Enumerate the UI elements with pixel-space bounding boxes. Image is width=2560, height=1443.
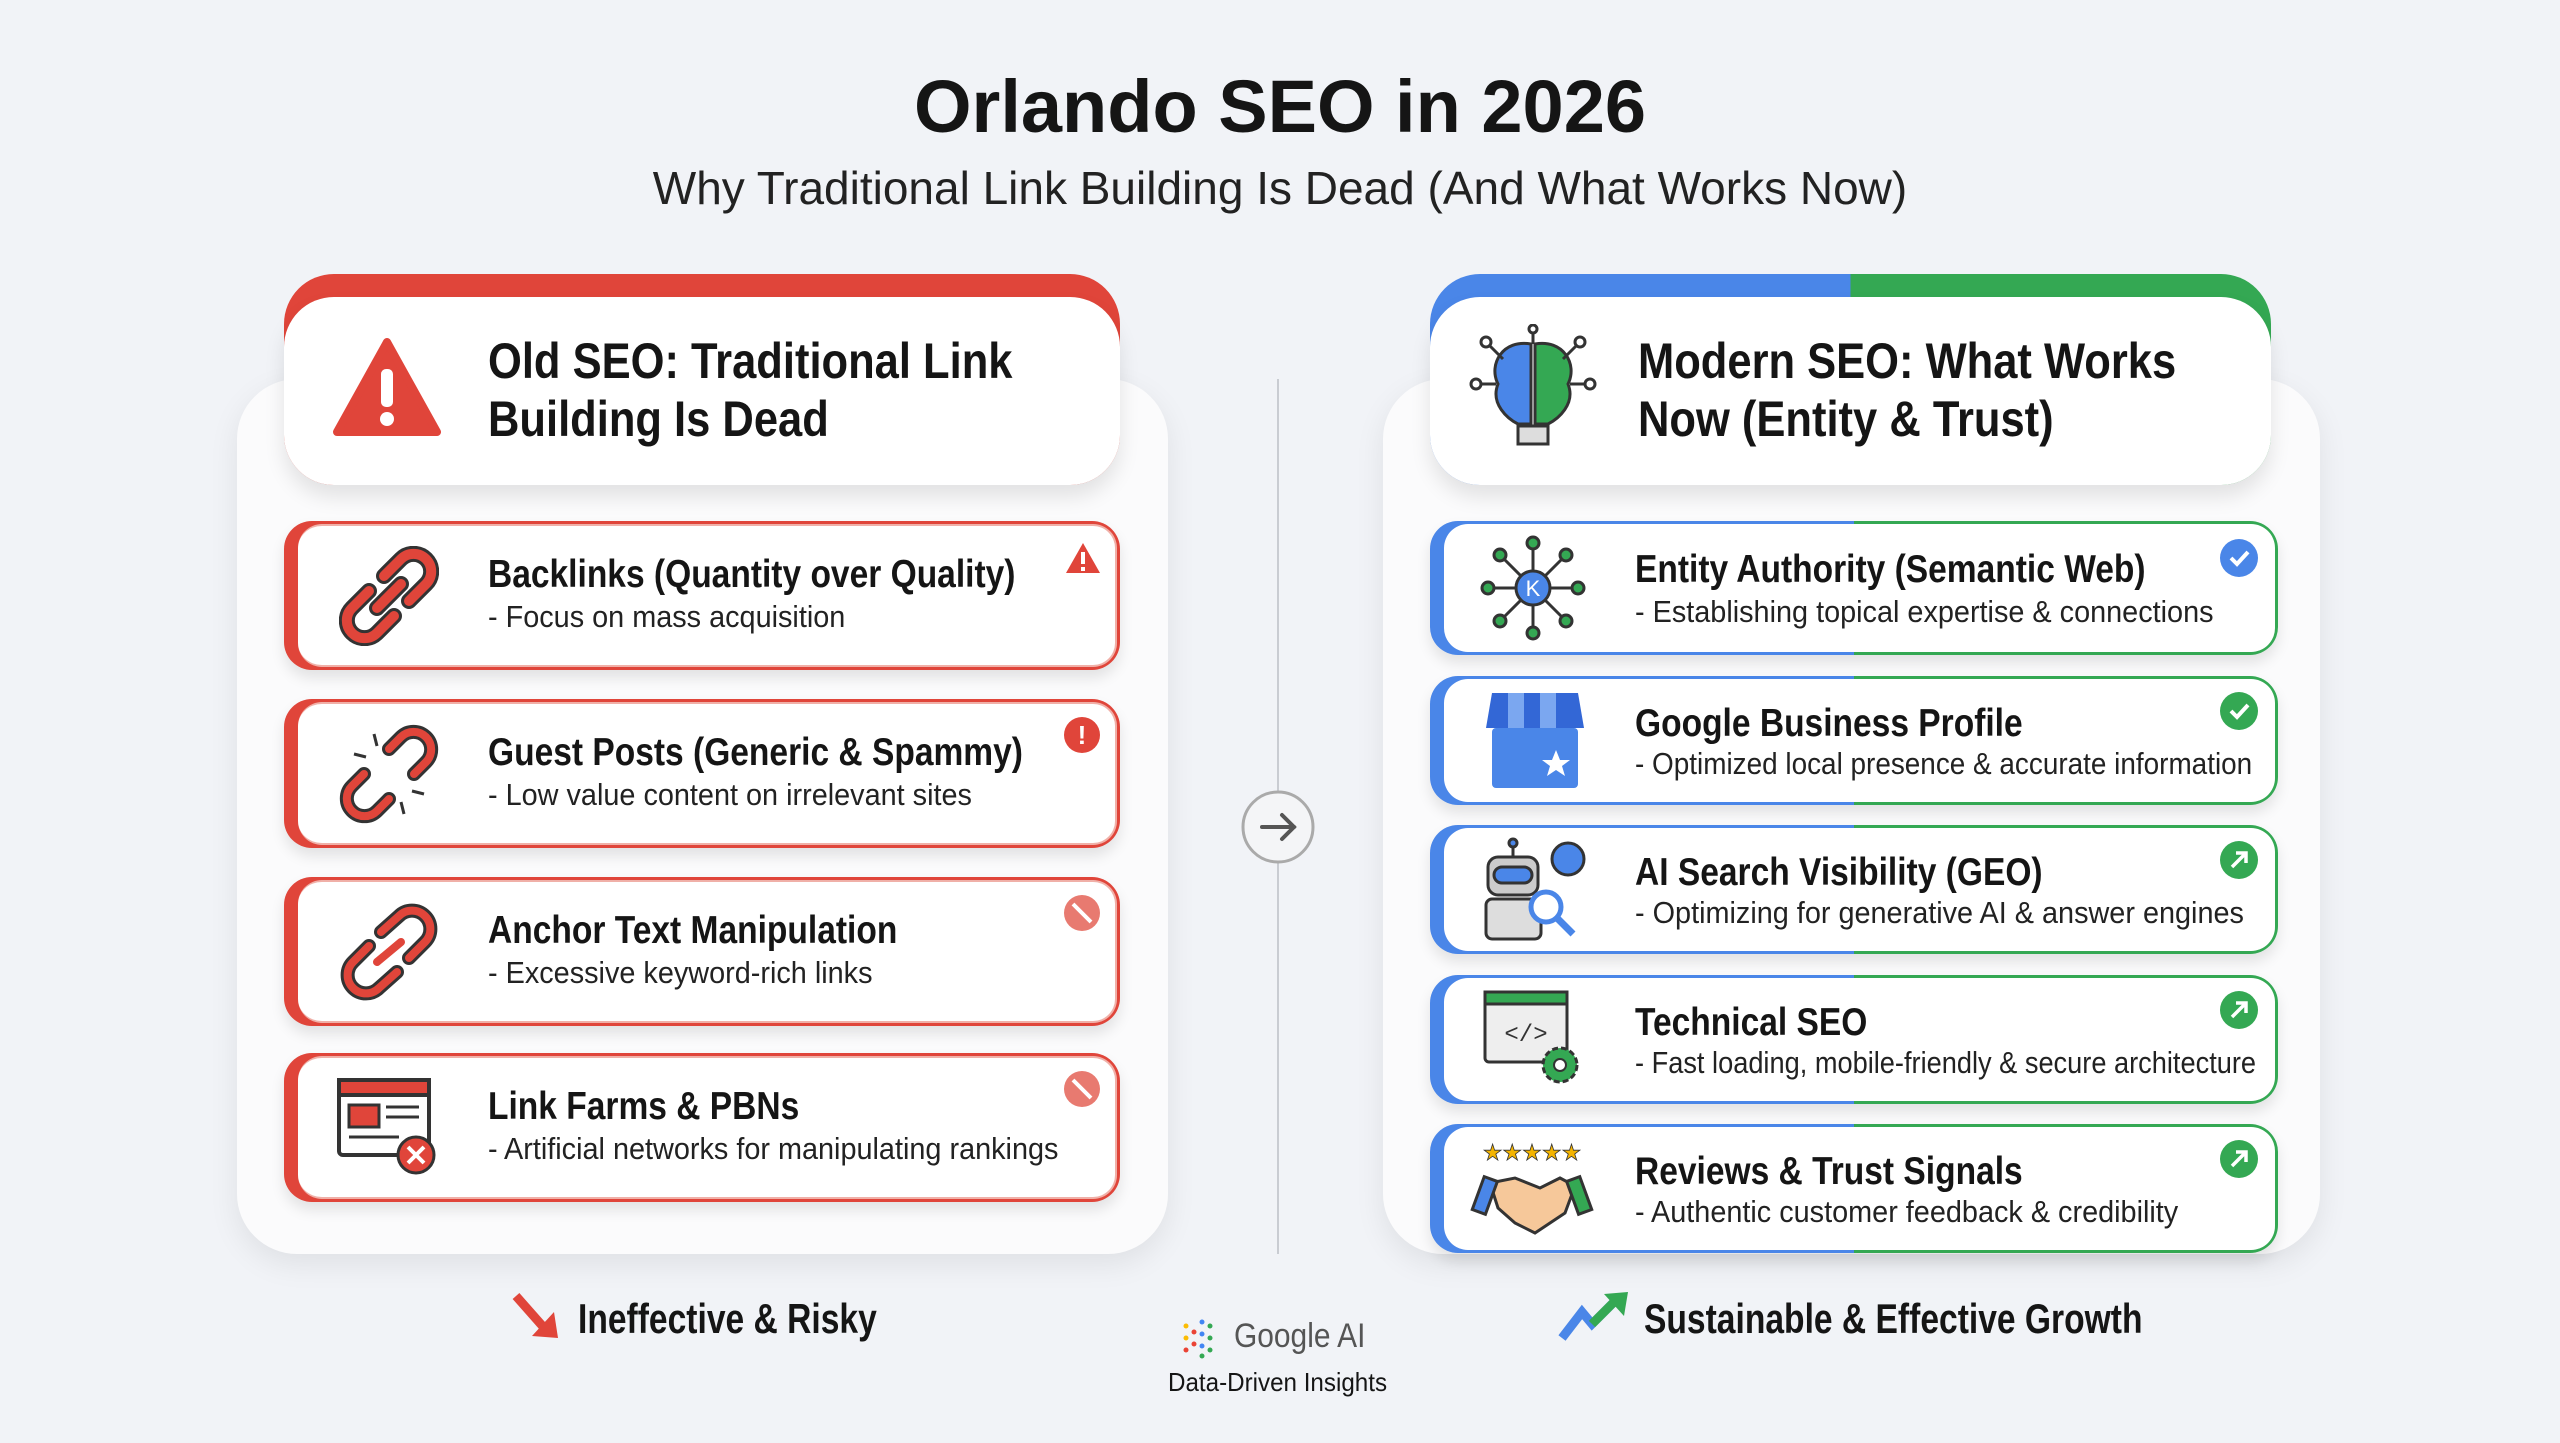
icon: growth arrow bbox=[1558, 1292, 1628, 1341]
item: guest posts bbox=[284, 699, 1120, 848]
badge: alert: ! bbox=[1078, 720, 1086, 750]
footer: google ai: Google AI bbox=[1234, 1317, 1365, 1355]
text: guest posts: Guest Posts (Generic & Spammy) bbox=[488, 731, 1023, 774]
icon: warning triangle bbox=[333, 338, 441, 436]
badge: blocked bbox=[1064, 1071, 1100, 1107]
item: anchor text: - Excessive keyword-rich links bbox=[488, 955, 872, 990]
icon: stars and handshake: ★★★★★ bbox=[1483, 1141, 1581, 1166]
item: backlinks bbox=[284, 521, 1120, 670]
text: backlinks: Backlinks (Quantity over Quality) bbox=[488, 553, 1015, 596]
footer: ineffective & risky: Ineffective & Risky bbox=[578, 1295, 877, 1342]
heading: old seo bbox=[488, 333, 1012, 447]
item: entity authority bbox=[1430, 521, 2278, 655]
icon: stars and handshake bbox=[1470, 1141, 1594, 1235]
item: link farms bbox=[284, 1053, 1120, 1202]
heading: modern seo: Now (Entity & Trust) bbox=[1638, 391, 2054, 447]
text: link farms: Link Farms & PBNs bbox=[488, 1085, 799, 1128]
icon: code window gear bbox=[1484, 990, 1578, 1084]
badge: trend up bbox=[2220, 841, 2258, 879]
panel: modern seo bbox=[1383, 379, 2320, 1254]
item: anchor text bbox=[284, 877, 1120, 1026]
item: google business profile bbox=[1430, 676, 2278, 805]
item: technical seo: - Fast loading, mobile-friendly & secure architecture bbox=[1635, 1045, 2256, 1080]
header: old seo bbox=[284, 274, 1120, 485]
heading: old seo: Old SEO: Traditional Link bbox=[488, 333, 1012, 389]
icon: looping link bbox=[340, 904, 438, 1000]
heading: modern seo bbox=[1638, 333, 2176, 447]
badge: blue check bbox=[2220, 539, 2258, 577]
header: modern seo bbox=[1430, 274, 2271, 485]
subtitle: Why Traditional Link Building Is Dead (And What Works Now) bbox=[653, 162, 1907, 214]
text: gbp: Google Business Profile bbox=[1635, 702, 2023, 745]
icon: browser with x bbox=[337, 1078, 436, 1174]
badge: green check bbox=[2220, 692, 2258, 730]
title: Orlando SEO in 2026 bbox=[914, 65, 1646, 148]
item: link farms: - Artificial networks for manipulating rankings bbox=[488, 1131, 1058, 1166]
item: technical seo bbox=[1430, 975, 2278, 1104]
item: reviews bbox=[1430, 1124, 2278, 1253]
icon: arrow circle bbox=[1242, 790, 1314, 864]
item: reviews: - Authentic customer feedback & credibility bbox=[1635, 1194, 2178, 1229]
badge: blocked bbox=[1064, 895, 1100, 931]
icon: red down arrow bbox=[512, 1293, 558, 1338]
icon: chain link bbox=[339, 546, 439, 646]
text: ai search: AI Search Visibility (GEO) bbox=[1635, 851, 2043, 894]
text: technical seo: Technical SEO bbox=[1635, 1001, 1867, 1044]
divider with arrow bbox=[1242, 379, 1314, 1254]
footer: sustainable growth: Sustainable & Effective Growth bbox=[1644, 1295, 2143, 1342]
item: backlinks: - Focus on mass acquisition bbox=[488, 599, 845, 634]
icon: entity network: K bbox=[1526, 576, 1541, 601]
icon: storefront bbox=[1486, 693, 1584, 788]
heading: modern seo: Modern SEO: What Works bbox=[1638, 333, 2176, 389]
icon: dots bbox=[1184, 1320, 1212, 1358]
icon: broken link bbox=[340, 724, 438, 824]
heading: old seo: Building Is Dead bbox=[488, 391, 829, 447]
text: reviews: Reviews & Trust Signals bbox=[1635, 1150, 2023, 1193]
badge: alert bbox=[1064, 717, 1100, 753]
text: entity authority: Entity Authority (Semantic Web) bbox=[1635, 548, 2146, 591]
item: guest posts: - Low value content on irrelevant sites bbox=[488, 777, 972, 812]
text: anchor text: Anchor Text Manipulation bbox=[488, 909, 897, 952]
badge: warning bbox=[1066, 543, 1100, 573]
icon: entity network bbox=[1480, 536, 1586, 640]
item: ai search visibility: - Optimizing for generative AI & answer engines bbox=[1635, 895, 2244, 930]
panel: old seo bbox=[237, 379, 1168, 1254]
badge: trend up bbox=[2220, 991, 2258, 1029]
icon: robot with globe bbox=[1484, 838, 1586, 940]
icon: brain bulb bbox=[1470, 324, 1596, 446]
item: ai search visibility bbox=[1430, 825, 2278, 954]
item: entity authority: - Establishing topical expertise & connections bbox=[1635, 594, 2214, 629]
icon: code window gear: </> bbox=[1504, 1022, 1548, 1049]
badge: trend up bbox=[2220, 1140, 2258, 1178]
item: google business profile: - Optimized local presence & accurate information bbox=[1635, 746, 2252, 781]
footer: google ai: Data-Driven Insights bbox=[1168, 1367, 1387, 1397]
footer: google ai bbox=[1168, 1317, 1387, 1397]
